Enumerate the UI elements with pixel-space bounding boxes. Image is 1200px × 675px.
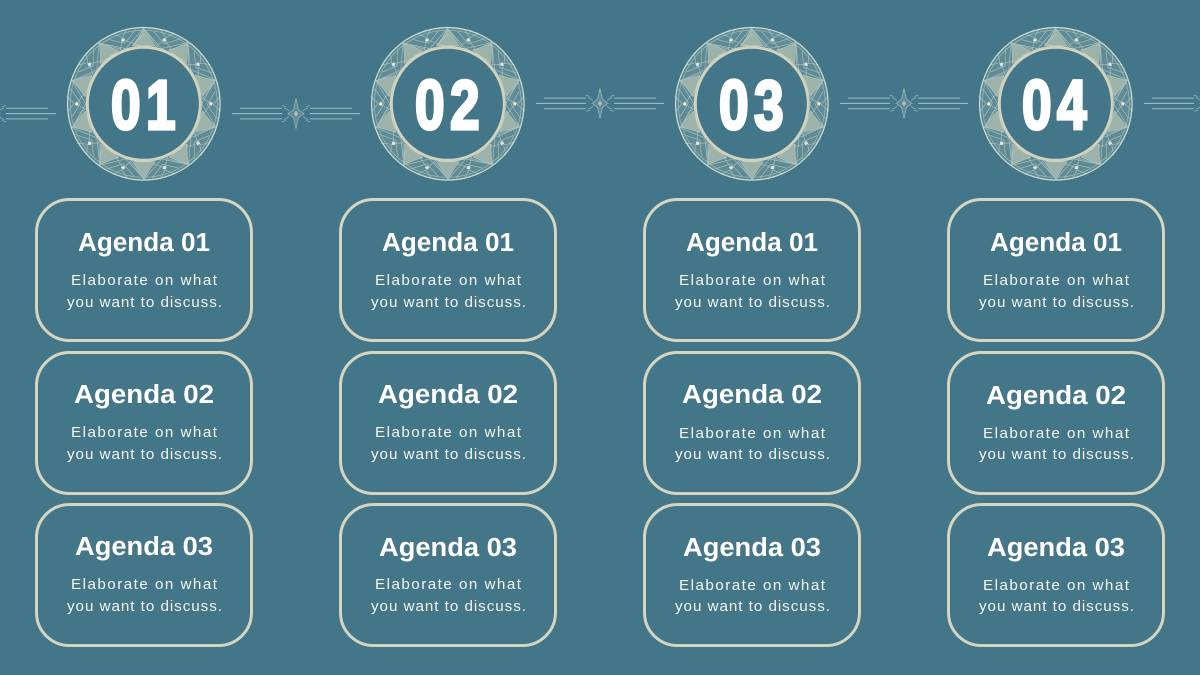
card: column 4 agenda 01: Agenda 01 — [990, 229, 1122, 257]
card: column 1 agenda 02: Agenda 02 — [74, 381, 214, 409]
card: column 1 agenda 01: you want to discuss. — [67, 294, 222, 311]
card: column 1 agenda 02: you want to discuss. — [67, 446, 222, 463]
medallion 04: 04 — [1022, 67, 1087, 145]
card: column 3 agenda 03 — [644, 504, 860, 646]
card: column 3 agenda 02: you want to discuss. — [675, 446, 830, 463]
card: column 2 agenda 01: you want to discuss. — [371, 294, 526, 311]
medallion 01 — [59, 17, 229, 191]
card: column 2 agenda 01: Agenda 01 — [382, 229, 514, 257]
card: column 3 agenda 01: you want to discuss. — [675, 294, 830, 311]
card: column 4 agenda 03: Elaborate on what — [983, 577, 1130, 594]
card: column 3 agenda 02: Agenda 02 — [682, 381, 822, 409]
card: column 4 agenda 02: Agenda 02 — [986, 382, 1126, 410]
card: column 2 agenda 03 — [340, 504, 556, 646]
card: column 1 agenda 03: Agenda 03 — [75, 533, 213, 561]
card: column 1 agenda 02 — [36, 352, 252, 494]
card: column 3 agenda 01: Agenda 01 — [686, 229, 818, 257]
card: column 4 agenda 01 — [948, 200, 1164, 340]
card: column 3 agenda 01: Elaborate on what — [679, 272, 826, 289]
card: column 2 agenda 02: Agenda 02 — [378, 381, 518, 409]
card: column 1 agenda 01: Elaborate on what — [71, 272, 218, 289]
card: column 2 agenda 03: Agenda 03 — [379, 534, 517, 562]
card: column 1 agenda 02: Elaborate on what — [71, 424, 218, 441]
card: column 2 agenda 03: you want to discuss. — [371, 598, 526, 615]
card: column 4 agenda 03: Agenda 03 — [987, 534, 1125, 562]
column 3 — [644, 17, 860, 645]
card: column 4 agenda 02: you want to discuss. — [979, 446, 1134, 463]
card: column 1 agenda 03: you want to discuss. — [67, 598, 222, 615]
connector ornament: between 01 and 02 — [232, 99, 360, 129]
connector ornament: between 03 and 04 — [840, 88, 968, 118]
card: column 1 agenda 01: Agenda 01 — [78, 229, 210, 257]
card: column 4 agenda 03: you want to discuss. — [979, 598, 1134, 615]
card: column 3 agenda 03: Agenda 03 — [683, 534, 821, 562]
card: column 1 agenda 03: Elaborate on what — [71, 576, 218, 593]
medallion 03: 03 — [719, 67, 784, 145]
card: column 3 agenda 02: Elaborate on what — [679, 425, 826, 442]
medallion 01: 01 — [111, 67, 176, 145]
connector ornament: right edge — [1144, 88, 1200, 118]
card: column 4 agenda 02 — [948, 352, 1164, 494]
card: column 2 agenda 03: Elaborate on what — [375, 576, 522, 593]
column 4 — [948, 17, 1164, 645]
card: column 4 agenda 02: Elaborate on what — [983, 425, 1130, 442]
card: column 3 agenda 01 — [644, 200, 860, 340]
card: column 2 agenda 01: Elaborate on what — [375, 272, 522, 289]
column 1 — [36, 17, 252, 645]
card: column 1 agenda 01 — [36, 200, 252, 340]
card: column 4 agenda 01: Elaborate on what — [983, 272, 1130, 289]
card: column 4 agenda 01: you want to discuss. — [979, 294, 1134, 311]
card: column 2 agenda 01 — [340, 200, 556, 340]
card: column 3 agenda 03: you want to discuss. — [675, 598, 830, 615]
connector ornament: between 02 and 03 — [536, 88, 664, 118]
card: column 1 agenda 03 — [36, 504, 252, 646]
medallion 02: 02 — [415, 67, 480, 145]
medallion 04 — [971, 17, 1141, 191]
card: column 2 agenda 02 — [340, 352, 556, 494]
medallion 03 — [667, 17, 837, 191]
medallion 02 — [363, 17, 533, 191]
connector ornament: left edge — [0, 99, 56, 129]
card: column 3 agenda 03: Elaborate on what — [679, 577, 826, 594]
column 2 — [340, 17, 556, 645]
card: column 4 agenda 03 — [948, 504, 1164, 646]
card: column 2 agenda 02: you want to discuss. — [371, 446, 526, 463]
card: column 3 agenda 02 — [644, 352, 860, 494]
card: column 2 agenda 02: Elaborate on what — [375, 424, 522, 441]
